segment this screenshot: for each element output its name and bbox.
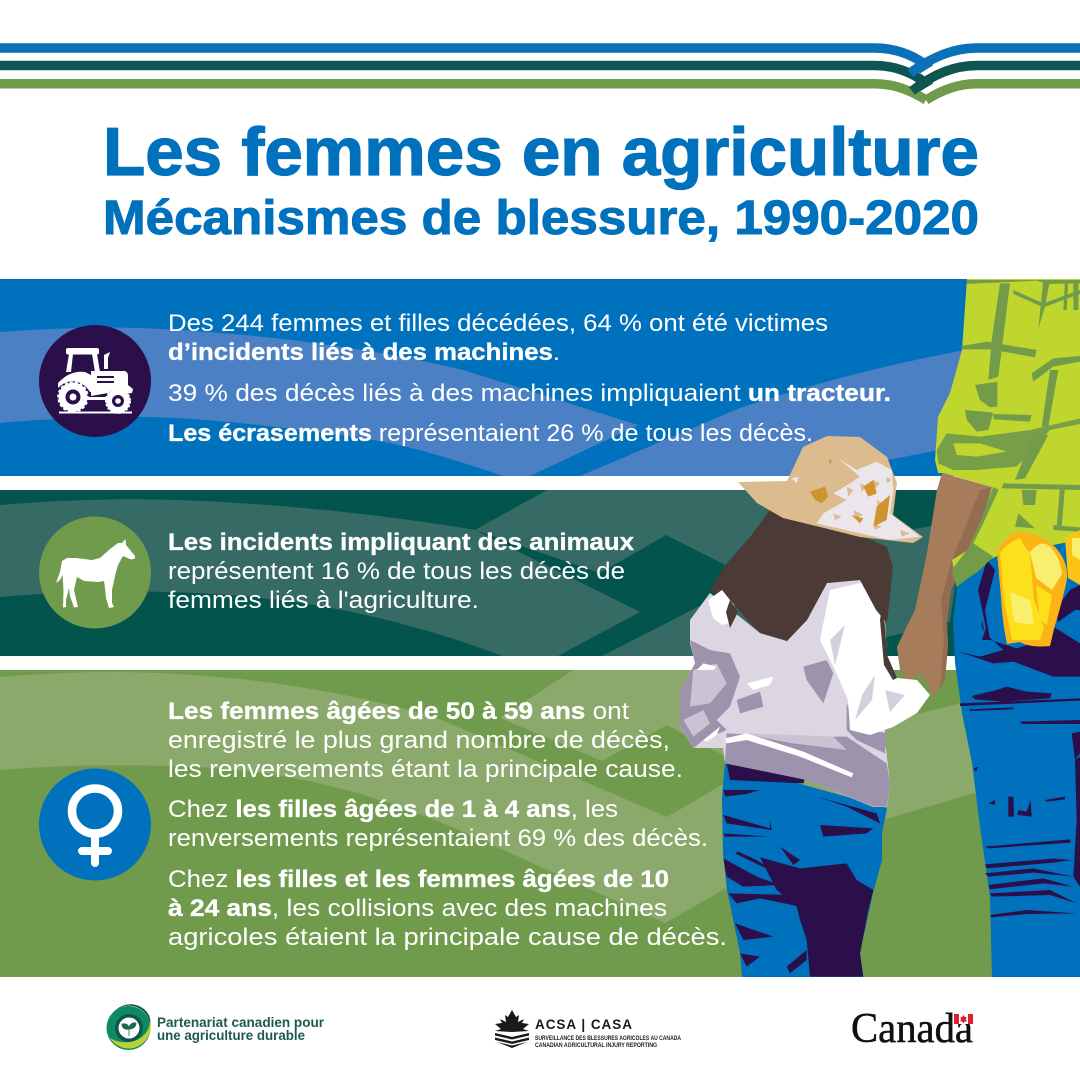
text: animal statistics: [168, 529, 634, 614]
text: machinery statistics: d’incidents liés à des machines .: [168, 339, 560, 366]
icon: tractor: [39, 325, 151, 437]
illustration: woman: [897, 279, 1080, 977]
logo swirl mark: [106, 1004, 151, 1050]
girl's white sleeve: [820, 582, 930, 735]
text: machinery statistics: 39 % des décès liés à des machines impliquaient un tracteur.: [168, 380, 891, 407]
text: age group statistics: Chez les filles âgées de 1 à 4 ans , les: [168, 796, 618, 823]
text: age group statistics: [168, 698, 727, 951]
illustration: girl: [680, 436, 930, 977]
icon: female symbol: [39, 768, 151, 880]
woman's plaid shirt: [935, 279, 1080, 587]
footer logo: ACSA CASA: ACSA | CASA: [535, 1017, 632, 1032]
text: age group statistics: Les femmes âgées de 50 à 59 ans ont: [168, 698, 629, 725]
woman's arm: [897, 473, 992, 698]
text: age group statistics: les renversements étant la principale cause.: [168, 756, 683, 783]
text: age group statistics: à 24 ans , les collisions avec des machines: [168, 895, 667, 922]
header ribbon: [0, 48, 1080, 100]
woman's jeans: [953, 540, 1080, 977]
title: [103, 114, 979, 245]
footer logo: Partenariat canadien: Partenariat canadien pour: [157, 1014, 325, 1030]
icon: Canadian flag: [954, 1014, 973, 1024]
title: Les femmes en agriculture: [103, 114, 979, 190]
work gloves in pocket: [997, 530, 1080, 646]
footer logo: Partenariat canadien: une agriculture durable: [157, 1027, 305, 1043]
text: animal statistics: Les incidents impliquant des animaux: [168, 529, 634, 556]
footer logo: ACSA CASA: SURVEILLANCE DES BLESSURES AGRICOLES AU CANADA: [535, 1035, 681, 1042]
text: age group statistics: Chez les filles et les femmes âgées de 10: [168, 866, 669, 893]
text: age group statistics: agricoles étaient la principale cause de décès.: [168, 924, 727, 951]
icon: maple leaf with furrows: [495, 1010, 529, 1048]
girl's straw hat: [738, 436, 923, 543]
text: age group statistics: enregistré le plus grand nombre de décès,: [168, 727, 670, 754]
panel: machinery incidents: [0, 279, 1080, 476]
footer logo: ACSA CASA: [495, 1010, 681, 1049]
text: machinery statistics: [168, 310, 891, 447]
girl's jeans: [722, 752, 887, 977]
text: animal statistics: représentent 16 % de tous les décès de: [168, 558, 625, 585]
text: machinery statistics: Des 244 femmes et filles décédées, 64 % ont été victimes: [168, 310, 828, 337]
footer logo: ACSA CASA: CANADIAN AGRICULTURAL INJURY REPORTING: [535, 1042, 657, 1049]
panel: age groups: [0, 670, 1080, 977]
text: age group statistics: renversements représentaient 69 % des décès.: [168, 825, 708, 852]
text: machinery statistics: Les écrasements représentaient 26 % de tous les décès.: [168, 420, 813, 447]
title: Mécanismes de blessure, 1990-2020: [103, 192, 979, 245]
girl's hair: [708, 510, 893, 641]
icon: horse: [39, 516, 151, 628]
footer logo: Partenariat canadien: [106, 1004, 325, 1050]
text: animal statistics: femmes liés à l'agriculture.: [168, 587, 479, 614]
panel: animal incidents: [0, 490, 1080, 656]
footer logo: Canada wordmark: Canada: [851, 1006, 973, 1052]
girl's sweatshirt: [680, 580, 930, 807]
